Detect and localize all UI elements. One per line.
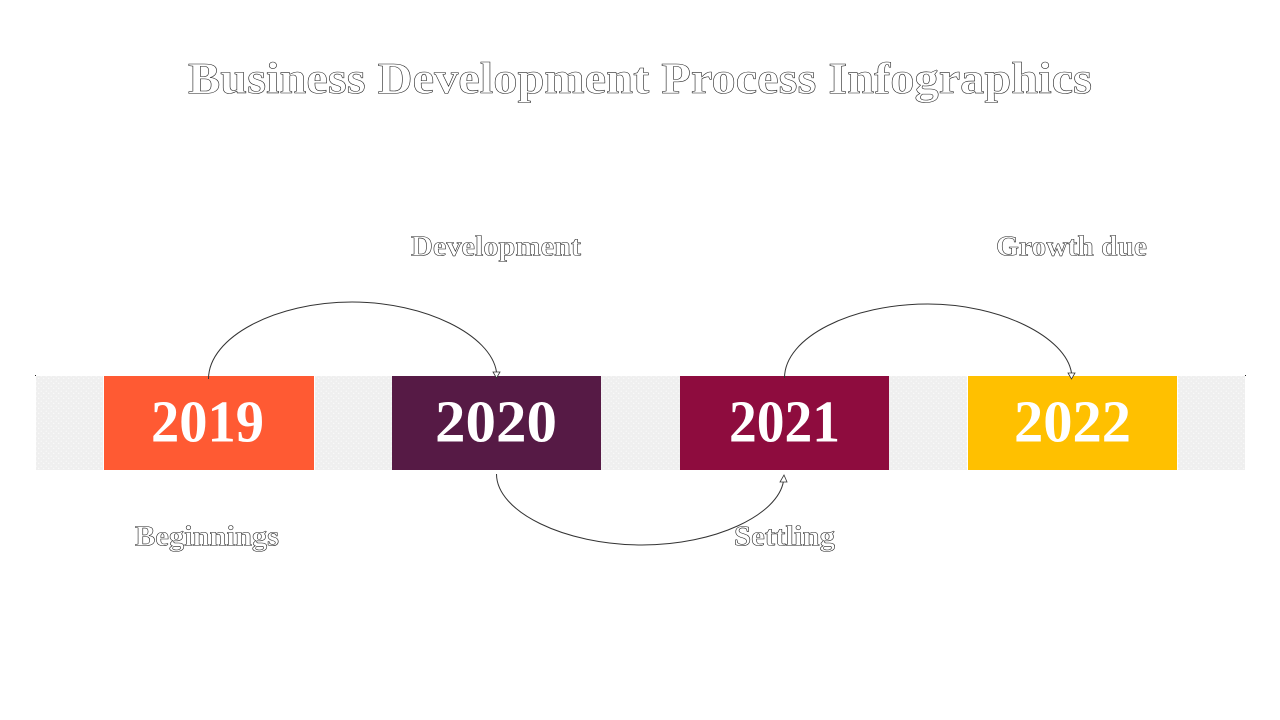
label: Beginnings: Beginnings — [135, 522, 279, 552]
year block: 2020: 2020 — [435, 388, 557, 454]
label: Settling: Settling — [734, 522, 835, 552]
timeline band — [35, 375, 1246, 470]
title: Business Development Process Infographics — [188, 54, 1092, 103]
label: Growth due: Growth due — [996, 232, 1147, 262]
year block: 2019 — [103, 376, 315, 470]
year block: 2022: 2022 — [1014, 388, 1131, 454]
year block: 2021: 2021 — [729, 388, 840, 454]
arrow: 2020 to 2021 — [496, 474, 787, 545]
arrow: 2019 to 2020 — [208, 302, 500, 379]
arrow: 2021 to 2022 — [784, 304, 1075, 379]
year block: 2022 — [967, 376, 1178, 470]
year block: 2020 — [392, 376, 601, 470]
label: Development: Development — [411, 232, 582, 262]
year block: 2021 — [680, 376, 889, 470]
year block: 2019: 2019 — [151, 388, 264, 454]
